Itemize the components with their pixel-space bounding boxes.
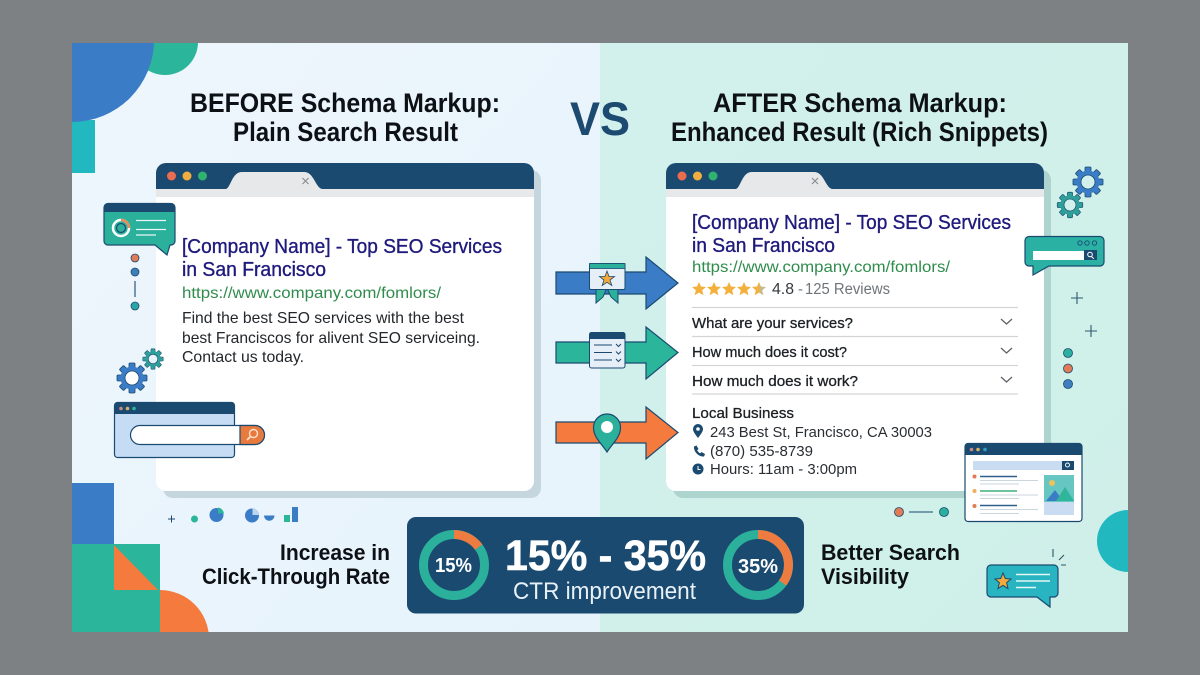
local business details: 243 Best St, Francisco, CA 30003 [710, 424, 932, 441]
title: after [671, 88, 1048, 147]
icon: chat analytics bubble [104, 204, 175, 255]
tab close icon [812, 178, 818, 184]
icon: connector dots left [131, 254, 139, 310]
result title: [Company Name] - Top SEO Services [692, 212, 1011, 234]
window dots [167, 172, 207, 180]
browser tab [736, 172, 832, 189]
star rating [692, 281, 890, 298]
faq list [692, 308, 1018, 394]
label: increase in click-through rate: Click-Through Rate [202, 564, 390, 589]
icon: result page window [965, 444, 1082, 522]
panel: before background [72, 43, 600, 632]
result description [182, 310, 480, 366]
title: after: AFTER Schema Markup: [713, 88, 1007, 118]
decorative shapes: top left [72, 43, 198, 173]
icon: map pin [594, 414, 620, 452]
arrow: teal faq [556, 327, 678, 379]
panel: after background [600, 43, 1128, 632]
donut: 35 percent [728, 534, 788, 596]
result title [692, 212, 1011, 257]
browser tab [226, 172, 322, 189]
plus marks right [1071, 292, 1097, 337]
main stat value: 15% - 35% [505, 532, 706, 580]
stat caption: CTR improvement [513, 578, 696, 605]
icon: star badge [590, 264, 625, 303]
title: after: Enhanced Result (Rich Snippets) [671, 117, 1048, 147]
decorative shapes: bottom left [72, 483, 208, 632]
label: better search visibility [821, 540, 960, 589]
star rating: 4.8 [772, 281, 794, 298]
icon: search chat bubble [1025, 236, 1104, 275]
arrow: blue rich rating [556, 257, 678, 309]
faq list: How much does it cost? [692, 344, 847, 361]
icon: connector dots right [1064, 348, 1072, 388]
title: before [190, 88, 500, 147]
arrow: orange local [556, 407, 678, 459]
window dots [678, 172, 718, 180]
local business details: Local Business [692, 405, 794, 422]
title: before: Plain Search Result [233, 117, 458, 147]
result title: [Company Name] - Top SEO Services [182, 236, 502, 258]
icon: gears left [117, 349, 163, 393]
result description: Find the best SEO services with the best [182, 310, 465, 327]
panel: ctr improvement stat [407, 517, 804, 614]
small chart icons [168, 507, 298, 522]
local business details [692, 405, 932, 478]
panel: after browser window [666, 163, 1051, 498]
result description: best Franciscos for alivent SEO serviceing. [182, 330, 480, 347]
label: increase in click-through rate [202, 540, 390, 589]
donut: 35 percent: 35% [738, 556, 778, 578]
result url: https://www.company.com/fomlors/ [692, 259, 951, 276]
donut: 15 percent: 15% [435, 555, 472, 577]
icon: gears right [1057, 167, 1103, 218]
faq list: What are your services? [692, 315, 853, 332]
tab close icon [302, 178, 308, 184]
panel: before browser window [156, 163, 541, 498]
local business details: (870) 535-8739 [710, 443, 813, 460]
result description: Contact us today. [182, 349, 304, 366]
result title: in San Francisco [182, 259, 326, 281]
result title [182, 236, 502, 281]
icon: star review bubble [987, 549, 1066, 607]
icon: checklist window [590, 332, 625, 368]
label: better search visibility: Visibility [821, 564, 910, 589]
label: better search visibility: Better Search [821, 540, 960, 565]
label: increase in click-through rate: Increase in [280, 540, 390, 565]
icon: search window [114, 402, 264, 458]
faq list: How much does it work? [692, 373, 858, 390]
decorative circle: right edge [1097, 510, 1128, 572]
icon: connector dots bottom [894, 508, 948, 516]
local business details: Hours: 11am - 3:00pm [710, 461, 857, 478]
result url: https://www.company.com/fomlors/ [182, 285, 442, 302]
donut: 15 percent [424, 534, 484, 596]
result title: in San Francisco [692, 235, 835, 257]
vs label: VS [570, 92, 630, 145]
star rating: 125 Reviews [805, 281, 890, 298]
star rating: - [798, 281, 803, 298]
title: before: BEFORE Schema Markup: [190, 88, 500, 118]
